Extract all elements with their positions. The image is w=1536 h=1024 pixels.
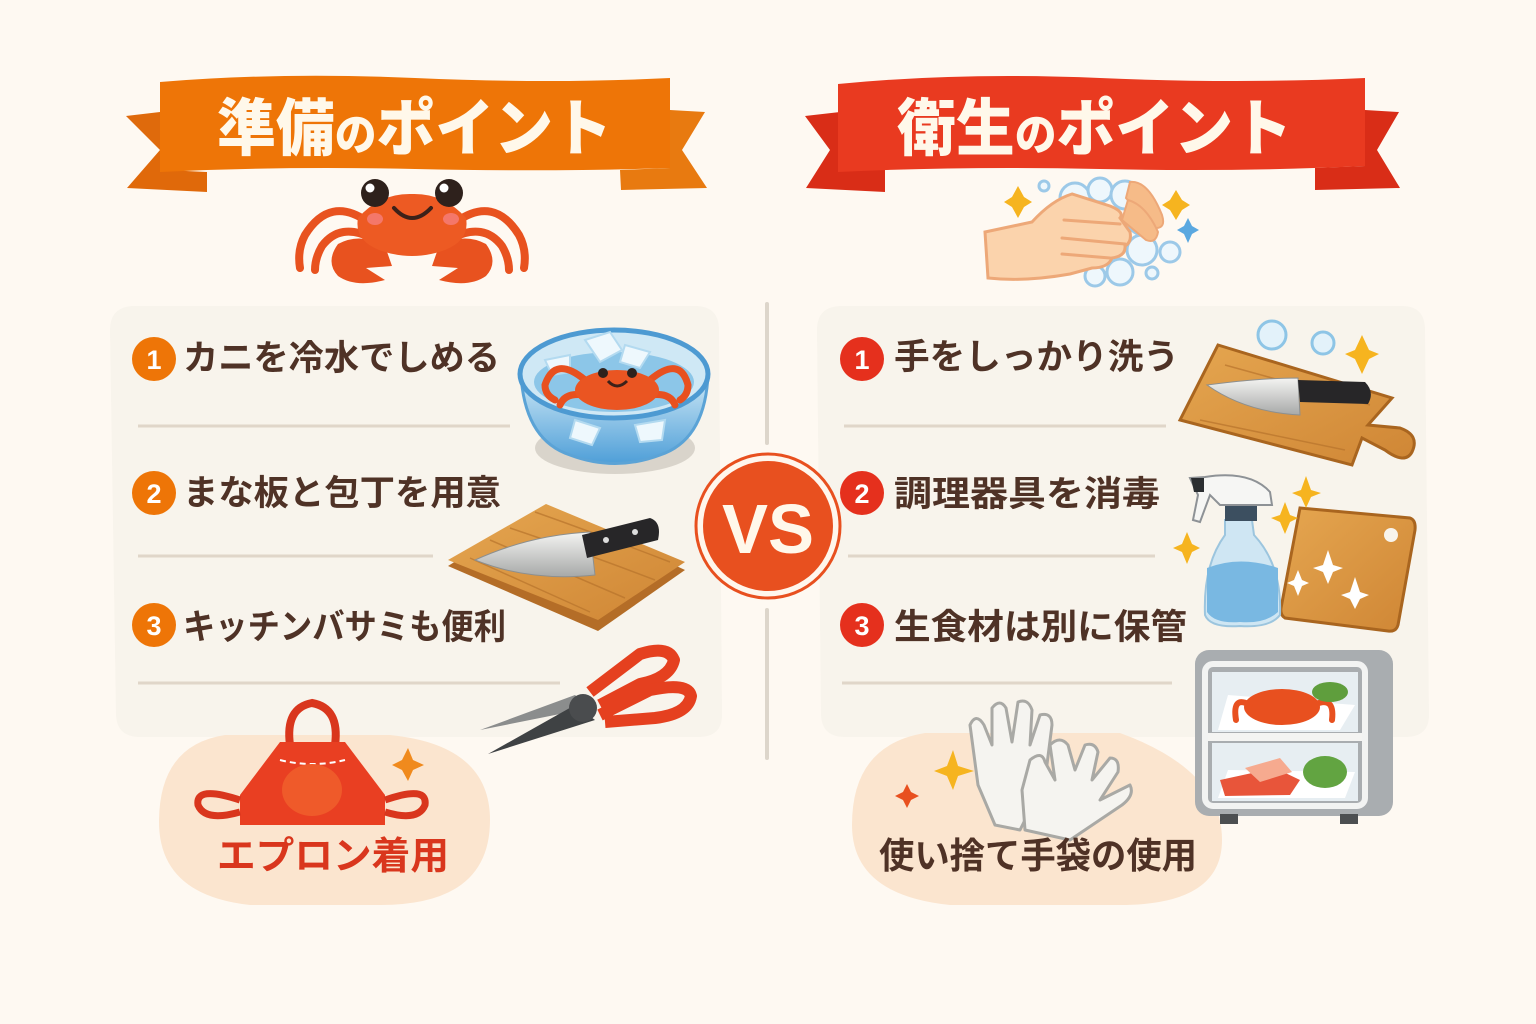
label: gloves: 使い捨て手袋の使用 — [879, 835, 1197, 876]
list: hygiene steps — [840, 337, 1187, 683]
callout: wear apron — [159, 703, 490, 905]
icon: crab mascot — [299, 179, 525, 283]
item 3: kitchen scissors: キッチンバサミも便利 — [183, 608, 506, 647]
banner: preparation title — [126, 76, 707, 192]
list: preparation steps — [132, 337, 560, 683]
item 1: cool crab: カニを冷水でしめる — [183, 339, 500, 378]
heading: hygiene: 衛生のポイント — [897, 95, 1292, 164]
divider: VS line — [765, 304, 769, 758]
item 1: wash hands: 手をしっかり洗う — [894, 338, 1179, 377]
badge: VS — [696, 454, 840, 598]
panel: hygiene list background — [817, 306, 1429, 737]
icon: crab in ice bowl — [520, 330, 708, 474]
item 2: board and knife: まな板と包丁を用意 — [183, 474, 501, 513]
item 3: kitchen scissors: 3 — [146, 611, 162, 641]
icon: hand washing with soap — [985, 178, 1199, 286]
item 2: disinfect tools: 調理器具を消毒 — [894, 475, 1160, 514]
badge: VS: VS — [722, 490, 814, 568]
icon: refrigerator with separated food — [1195, 650, 1393, 824]
panel: preparation list background — [110, 306, 722, 737]
item 2: disinfect tools — [840, 471, 1160, 515]
icon: cutting board knife and sparkles — [1180, 321, 1414, 465]
icon: apron — [198, 703, 425, 825]
heading: preparation: 準備のポイント — [217, 95, 612, 164]
label: apron: エプロン着用 — [217, 836, 449, 878]
icon: spray bottle and board — [1173, 475, 1415, 631]
item 3: store raw food separately: 生食材は別に保管 — [894, 608, 1187, 647]
icon: gloves — [970, 701, 1131, 840]
icon: cutting board and knife — [448, 504, 685, 631]
item 2: board and knife: 2 — [146, 479, 162, 509]
item 3: store raw food separately: 3 — [854, 611, 870, 641]
callout: disposable gloves — [852, 701, 1222, 905]
banner: hygiene title — [805, 76, 1400, 192]
item 2: disinfect tools: 2 — [854, 479, 870, 509]
back hand fingers — [1122, 182, 1163, 241]
item 1: cool crab: 1 — [146, 345, 162, 375]
icon: kitchen scissors — [480, 651, 691, 754]
item 1: wash hands: 1 — [854, 345, 870, 375]
